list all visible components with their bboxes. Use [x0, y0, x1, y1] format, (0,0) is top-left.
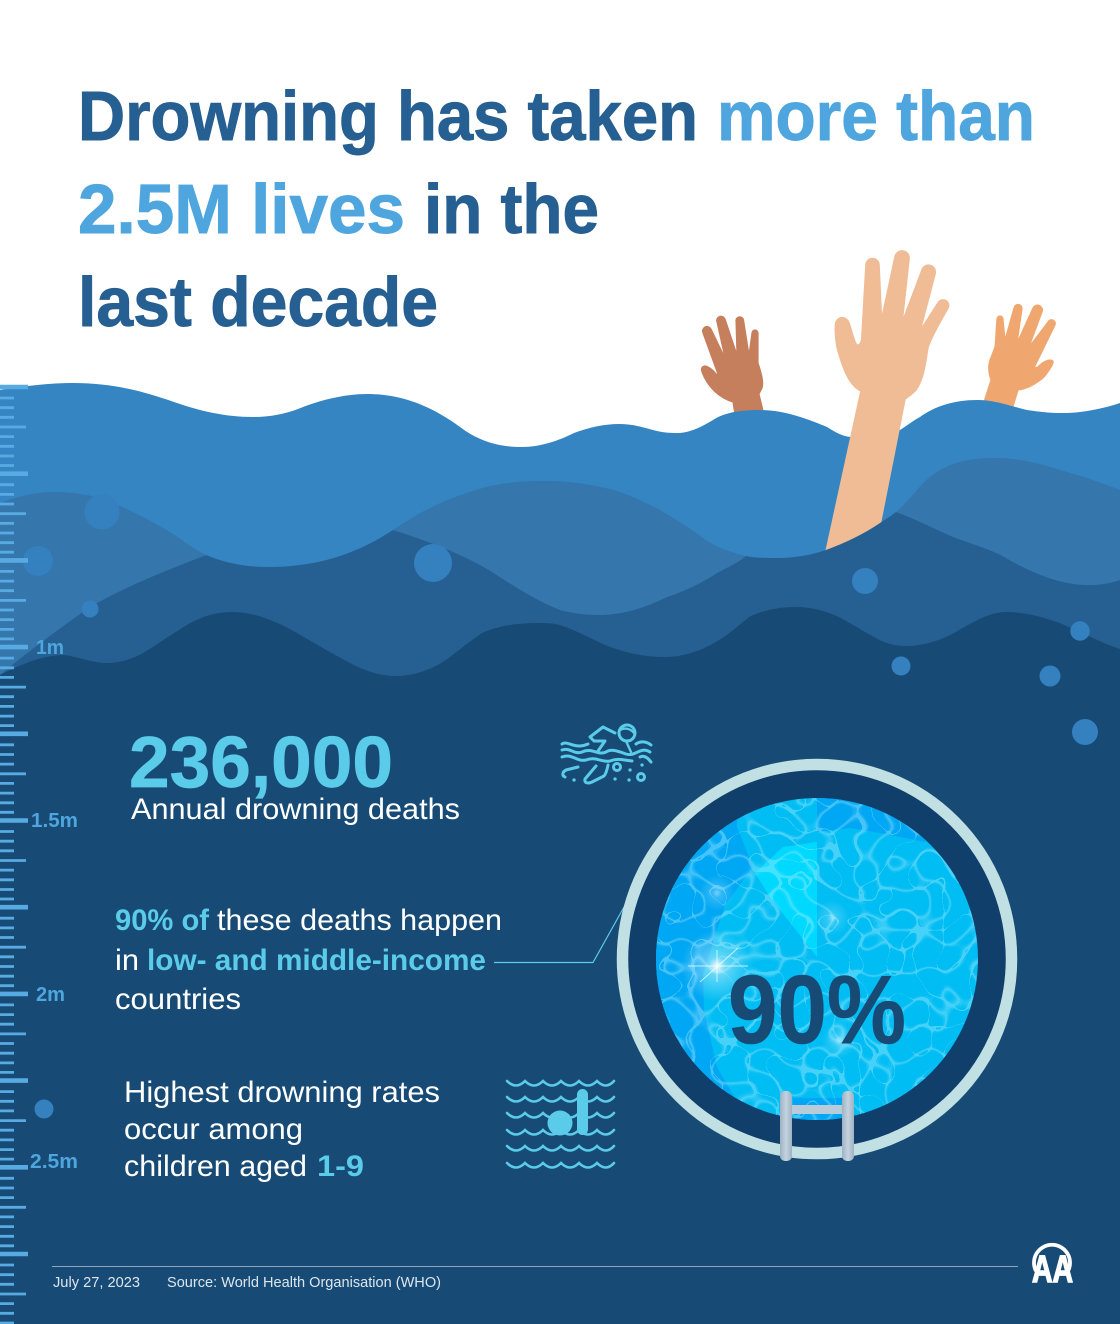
stat: ninety percent text: these deaths happen [217, 904, 502, 937]
stat: children aged 1-9: 1-9 [317, 1150, 364, 1183]
ruler labels: 2m [36, 984, 65, 1006]
icon: large raised hand and arm [822, 251, 949, 570]
pool: ring [622, 764, 1012, 1154]
stat: ninety percent text: low- and middle-income [147, 944, 486, 977]
wave: deep water background [0, 607, 1120, 1324]
title [78, 77, 1035, 341]
stat: children aged 1-9 [124, 1076, 440, 1183]
title: last decade [78, 263, 438, 341]
connector line [494, 907, 624, 962]
icon: person in waves [507, 1081, 614, 1168]
wave: medium layer centre hump [393, 481, 746, 615]
pool: 90% label: 90% [728, 955, 906, 1064]
logo: AA [1032, 1245, 1073, 1291]
title: 2.5M lives [78, 170, 405, 248]
pool: ladder [780, 1091, 854, 1161]
ruler labels: 1.5m [31, 810, 78, 832]
icon: swimmer [562, 725, 651, 783]
stat: children aged 1-9: occur among [124, 1113, 303, 1146]
stat: children aged 1-9: children aged [124, 1150, 307, 1183]
ruler labels [30, 637, 78, 1173]
stat: annual drowning deaths [129, 723, 460, 826]
pool: water [640, 795, 984, 1125]
footer divider [52, 1266, 1018, 1268]
logo: AA: AA [1032, 1249, 1073, 1291]
icon: brown hand [702, 316, 764, 415]
wave: medium layer right hump [896, 458, 1120, 585]
title: in the [424, 170, 599, 248]
stat: annual drowning deaths: Annual drowning deaths [131, 793, 460, 826]
bubbles [23, 494, 1098, 1118]
stat: ninety percent text: 90% of [115, 904, 210, 937]
ruler labels: 1m [36, 637, 64, 659]
depth ruler [0, 387, 28, 1323]
stat: children aged 1-9: Highest drowning rates [124, 1076, 440, 1109]
stat: ninety percent text: countries [115, 983, 241, 1016]
icon: orange hand [982, 304, 1055, 410]
stat: ninety percent text: in [115, 944, 139, 977]
footer date: July 27, 2023 [53, 1275, 140, 1291]
wave: top light layer [0, 383, 1120, 720]
wave: medium layer left [0, 492, 206, 680]
title: Drowning has taken [78, 77, 698, 155]
title: more than [717, 77, 1035, 155]
stat: annual drowning deaths: 236,000 [129, 723, 393, 803]
ruler labels: 2.5m [30, 1151, 78, 1173]
stat: ninety percent text [115, 904, 502, 1016]
footer source: Source: World Health Organisation (WHO) [167, 1275, 441, 1291]
wave: mid dark layer [0, 512, 1120, 720]
